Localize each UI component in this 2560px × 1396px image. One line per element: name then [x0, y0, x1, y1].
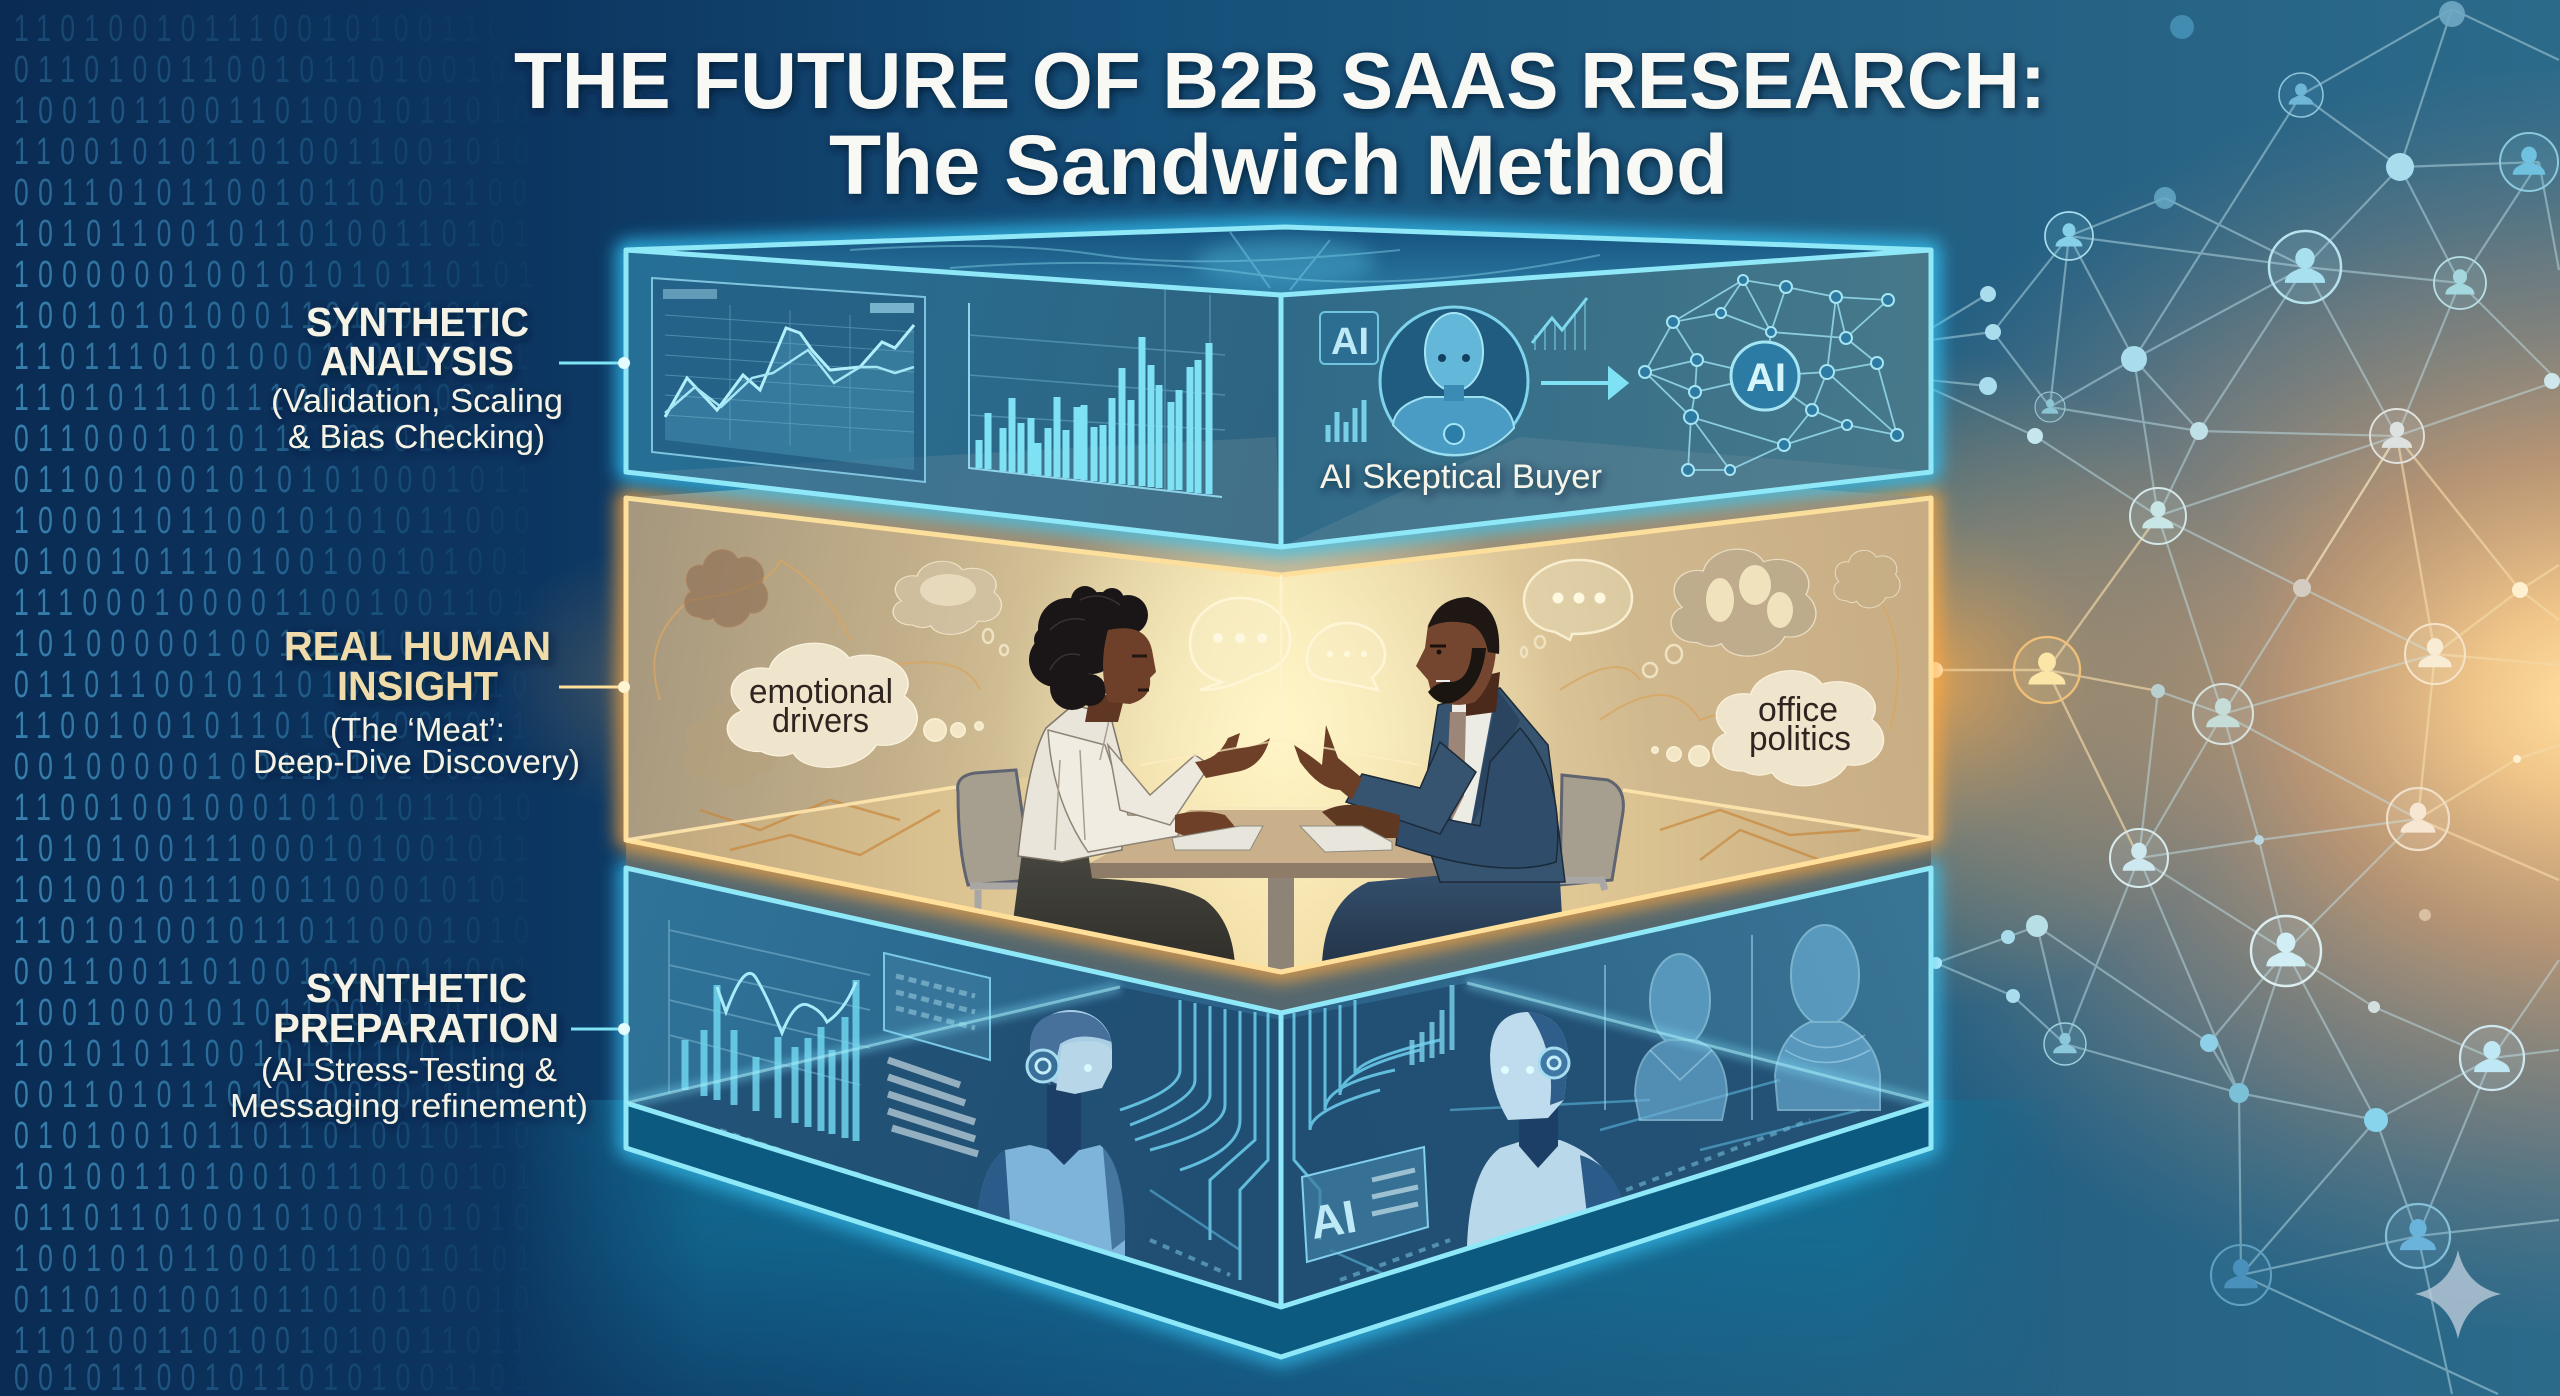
label: real human insight: INSIGHT [337, 663, 498, 709]
label: real human insight: REAL HUMAN [284, 623, 551, 669]
binary code pattern: 0011010110101001011010 [14, 1072, 538, 1115]
icon: sparkle watermark [2415, 1250, 2501, 1339]
binary code pattern: 0110101001011010110010 [14, 1277, 538, 1320]
label: synthetic analysis: SYNTHETIC [306, 299, 529, 345]
edges [626, 498, 1931, 972]
AI network: AI [1746, 356, 1786, 400]
binary code pattern: 0101001011011010010110 [14, 1113, 538, 1156]
icon: AI badge [1320, 312, 1378, 364]
dark circuit floor [626, 983, 1931, 1307]
binary code pattern: 0100101110100100101001 [14, 539, 540, 582]
layer: real human insight (middle) [626, 480, 1931, 990]
label: synthetic analysis: (Validation, Scaling [271, 382, 563, 419]
glow [626, 498, 1931, 972]
label: synthetic preparation: SYNTHETIC [306, 965, 527, 1011]
speech bubbles [924, 560, 1709, 766]
AI panel: AI [1306, 1190, 1360, 1249]
binary code pattern: 0011010110010110101100 [14, 170, 536, 213]
binary code pattern: 1010011010010110100101 [14, 1154, 540, 1197]
walls [626, 868, 1281, 1307]
label: real human insight: Deep-Dive Discovery) [253, 743, 580, 780]
layer: synthetic analysis (top) [626, 227, 1931, 547]
binary code pattern: 0110110010110100110010 [14, 662, 536, 705]
top band [626, 480, 1931, 575]
right mini bars [1412, 985, 1452, 1065]
label: synthetic analysis: & Bias Checking) [288, 418, 545, 455]
binary code pattern: 1001010100011010010110 [14, 293, 540, 336]
label: real human insight [253, 623, 580, 780]
top face [626, 227, 1931, 295]
scene: conversation [958, 586, 1623, 990]
caption: AI Skeptical Buyer: AI Skeptical Buyer [1320, 458, 1602, 496]
thought wisps [654, 560, 1898, 730]
arrow [1541, 370, 1626, 396]
floor dashes [680, 1120, 1860, 1280]
chart grid [669, 920, 870, 1093]
title: The Sandwich Method [829, 118, 1728, 212]
cloud: emotional drivers: emotional [749, 673, 893, 711]
connector: analysis [559, 357, 630, 369]
man [1294, 597, 1623, 990]
binary code pattern: 1100100101101011001011 [14, 703, 536, 746]
network: people connections [1901, 1, 2560, 1394]
cloud: emotional drivers [727, 643, 917, 767]
clouds [683, 549, 1900, 787]
AI network [1639, 275, 1903, 476]
binary code pattern: 0110110100101001101010 [14, 1195, 538, 1238]
label: synthetic preparation: Messaging refinement) [230, 1087, 588, 1124]
mini bars [1328, 400, 1364, 442]
label: synthetic analysis [271, 299, 563, 455]
binary code pattern: 0110001010111001010110 [14, 416, 536, 459]
binary code pattern: 1000000100101010110101 [14, 252, 542, 295]
cloud: office politics [1713, 671, 1883, 786]
edges [626, 868, 1931, 1357]
binary code pattern: 1010110010110100110101 [14, 211, 538, 254]
label: synthetic preparation: (AI Stress-Testing & [261, 1051, 557, 1088]
floor [626, 740, 1931, 972]
title: THE FUTURE OF B2B SAAS RESEARCH: [514, 36, 2046, 125]
label: synthetic analysis: ANALYSIS [320, 338, 514, 384]
icon: person nodes [2014, 73, 2558, 1305]
binary code pattern: 1010101100101101001101 [14, 1031, 538, 1074]
label: real human insight: (The ‘Meat’: [330, 711, 505, 748]
left face [626, 250, 1281, 547]
network links blue [1907, 9, 2559, 1394]
floor sheen [626, 437, 1281, 547]
label: synthetic preparation: PREPARATION [273, 1005, 559, 1051]
binary code pattern [14, 6, 544, 1396]
cloud: office politics: politics [1749, 720, 1851, 758]
binary code pattern: 1001010110010110010101 [14, 1236, 540, 1279]
robot left [977, 1010, 1125, 1270]
center glow [1050, 537, 1506, 944]
edges [626, 227, 1931, 547]
cloud: office politics: office [1758, 691, 1838, 729]
binary code pattern: 1100100100010101011010 [14, 785, 540, 828]
bar chart [685, 980, 856, 1141]
binary code pattern: 1101110101000110100101 [14, 334, 536, 377]
data panels [884, 953, 990, 1060]
binary code pattern: 1110001000011001001101 [14, 580, 536, 623]
binary code pattern: 1100101011010011001010 [14, 129, 538, 172]
table [1090, 808, 1480, 978]
binary code pattern: 1101001101001010011011 [14, 1318, 536, 1361]
small nodes [1901, 1, 2560, 1132]
binary code pattern: 1101011101110010110011 [14, 375, 530, 418]
binary code pattern: 1001011001101001011010 [14, 88, 538, 131]
sparkline [1532, 298, 1587, 350]
circuit traces [1120, 1000, 1440, 1280]
icon: AI robot [1380, 307, 1528, 455]
right face [1281, 250, 1931, 547]
AI panel [1302, 1147, 1428, 1262]
title [514, 36, 2046, 212]
glow [626, 227, 1931, 547]
walls [626, 498, 1281, 972]
binary code pattern: 0011001101001010011001 [14, 949, 538, 992]
label: synthetic preparation [230, 965, 588, 1124]
woman [958, 586, 1270, 985]
robot right [1467, 1012, 1622, 1246]
network links warm [1935, 436, 2559, 880]
binary code pattern: 1010010111001100010101 [14, 867, 538, 910]
layer: synthetic preparation (bottom) [626, 838, 1931, 1357]
band under mid layer [626, 838, 1931, 1013]
line chart panel [652, 278, 925, 482]
base side faces [626, 1103, 1931, 1357]
binary code pattern: 1000110110010101011000 [14, 498, 538, 541]
cloud: emotional drivers: drivers [772, 702, 869, 740]
bar chart [969, 290, 1225, 497]
connector: preparation [571, 1023, 630, 1035]
binary code pattern: 1101001011100101001101 [14, 6, 536, 49]
binary code pattern: 0010000010011010100100 [14, 744, 542, 787]
ghost robots [1635, 925, 1880, 1120]
binary code pattern: 1010000010010101010101 [14, 621, 544, 664]
connector: insight [559, 681, 630, 693]
binary code pattern: 1001000101011001010110 [14, 990, 540, 1033]
binary code pattern: 1010100111000101001011 [14, 826, 538, 869]
bottom glow [626, 868, 1931, 1357]
light beam glow [626, 983, 1931, 1103]
binary code pattern: 0110100110010110100101 [14, 47, 538, 90]
binary code pattern: 0110010010101010001011 [14, 457, 540, 500]
contents [626, 920, 1931, 1290]
binary code pattern: 1101010010110110001010 [14, 908, 538, 951]
icon: AI badge: AI [1331, 321, 1369, 363]
